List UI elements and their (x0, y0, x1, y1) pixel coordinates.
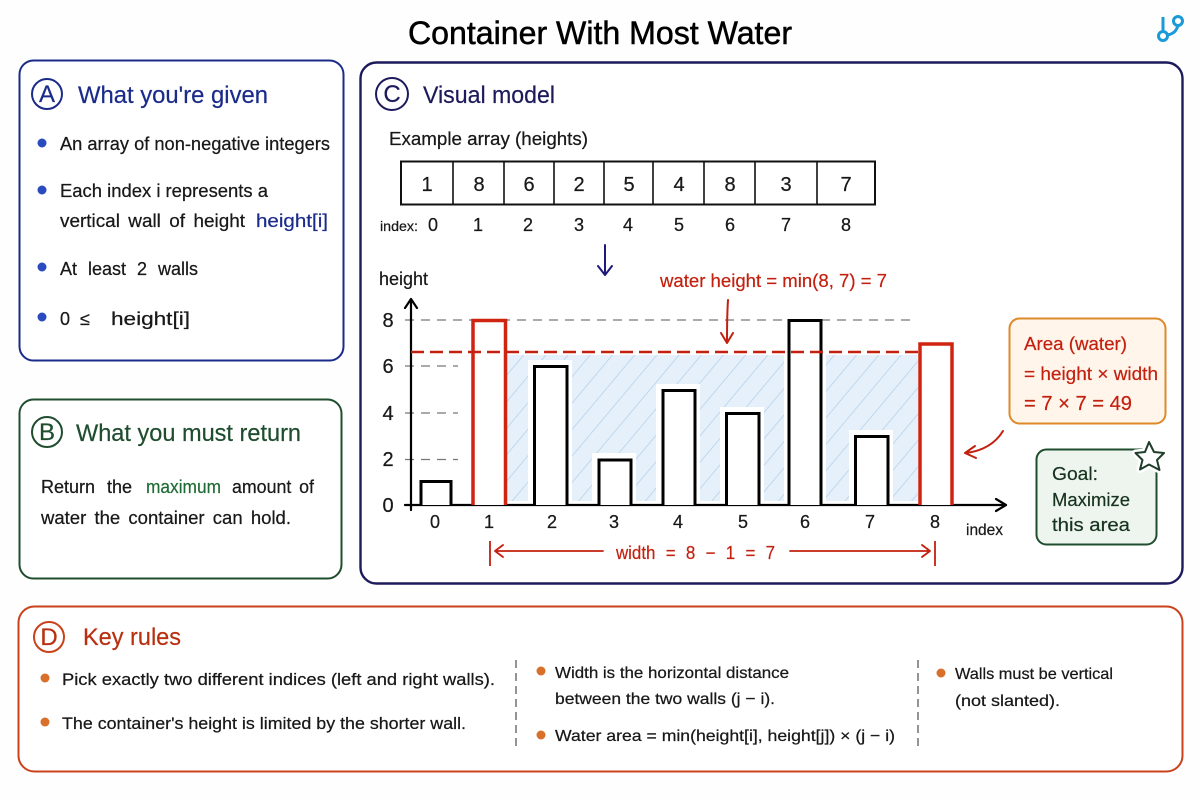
heading D (34, 622, 181, 652)
array index labels: 2 (523, 215, 533, 235)
rules column 3: Walls must be vertical (955, 666, 1113, 683)
x axis title: index (966, 522, 1003, 539)
panel B: what you must return (20, 400, 342, 578)
rules column 2: between the two walls (j − i). (555, 691, 775, 708)
array boxes: 7 (840, 174, 852, 196)
return statement: amount of (232, 477, 315, 497)
panel D: key rules (18, 606, 1182, 772)
x axis labels: 8 (930, 512, 940, 532)
array boxes: 8 (473, 174, 485, 196)
bullet list A (38, 134, 330, 329)
heading B: B (39, 419, 55, 446)
y axis labels: 8 (382, 310, 394, 332)
rules column 1: Pick exactly two different indices (left and right walls). (62, 670, 495, 689)
bullet list A: An array of non-negative integers (60, 134, 330, 154)
array boxes: 4 (673, 174, 685, 196)
array boxes: 1 (421, 174, 433, 196)
bullet list A: At least 2 walls (60, 259, 198, 279)
array index labels: 6 (725, 215, 735, 235)
bullet list A: ≤ (80, 309, 90, 329)
x axis labels: 4 (673, 512, 683, 532)
y axis labels: 6 (382, 356, 394, 378)
bullet list A: height[i] (256, 211, 328, 231)
arrow: water height (721, 300, 733, 343)
rules column 2: Width is the horizontal distance (555, 665, 789, 682)
icon: branch logo (1158, 16, 1182, 40)
array index labels: 8 (841, 215, 851, 235)
arrow: array to chart (598, 245, 612, 275)
y axis title: height (379, 269, 428, 289)
x axis labels: 3 (609, 512, 619, 532)
array boxes (401, 161, 875, 205)
water level line (411, 351, 918, 353)
arrow: callout to chart (965, 431, 1003, 458)
array boxes: 8 (724, 174, 736, 196)
width annotation: width = 8 − 1 = 7 (615, 543, 775, 563)
return statement (40, 477, 315, 528)
rules column 3: (not slanted). (955, 693, 1060, 710)
return statement: maximum (146, 477, 221, 497)
rules column 3 (936, 666, 1113, 710)
array index labels: index: (380, 218, 418, 234)
panel A: what you're given (20, 60, 344, 360)
heading C (376, 78, 555, 110)
heading A: A (39, 81, 55, 108)
panel C: visual model (360, 62, 1182, 584)
heading C: Visual model (423, 82, 555, 109)
y axis labels: 4 (382, 403, 394, 425)
x axis labels: 7 (865, 512, 875, 532)
array index labels: 7 (781, 215, 791, 235)
rules column 1 (40, 670, 495, 733)
array boxes: 3 (780, 174, 792, 196)
callout: goal: Maximize (1052, 490, 1130, 510)
width annotation (490, 541, 935, 566)
highlighted walls (473, 320, 952, 505)
heading D: D (40, 624, 58, 651)
x axis labels: 2 (547, 512, 557, 532)
return statement: water the container can hold. (40, 508, 291, 528)
callout: area formula: Area (water) (1024, 334, 1127, 354)
array index labels: 5 (674, 215, 684, 235)
heading B: What you must return (76, 420, 301, 447)
array index labels: 3 (574, 215, 584, 235)
heading A: What you're given (78, 82, 268, 109)
callout: goal: Goal: (1052, 464, 1098, 484)
callout: area formula: = height × width (1024, 364, 1158, 384)
icon: star (1136, 442, 1164, 470)
y axis labels: 0 (382, 495, 394, 517)
y axis labels (382, 310, 394, 517)
array boxes: 2 (573, 174, 585, 196)
callout: goal (1036, 442, 1164, 544)
rules column 2: Water area = min(height[i], height[j]) × (j − i) (555, 728, 895, 745)
water height label: water height = min(8, 7) = 7 (659, 271, 887, 291)
example array label: Example array (heights) (389, 129, 588, 149)
bullet list A: vertical wall of height (60, 211, 245, 231)
array index labels: 0 (428, 215, 438, 235)
bullet list A: Each index i represents a (60, 181, 269, 201)
callout: area formula (1010, 318, 1166, 424)
x axis labels: 0 (430, 512, 440, 532)
rules column 1: The container's height is limited by the shorter wall. (62, 714, 466, 733)
callout: area formula: = 7 × 7 = 49 (1024, 393, 1132, 415)
axes (405, 299, 1006, 511)
grid lines (405, 320, 910, 460)
rules column 2 (536, 665, 895, 745)
array boxes: 5 (623, 174, 635, 196)
x axis labels (430, 512, 940, 532)
return statement: Return the (41, 477, 132, 497)
bars (421, 320, 888, 505)
bullet list A: height[i] (111, 309, 190, 329)
bullet list A: 0 (60, 309, 70, 329)
y axis labels: 2 (382, 449, 394, 471)
water area (507, 340, 918, 501)
title: Container With Most Water (408, 15, 792, 51)
array index labels (380, 215, 851, 235)
bar chart (379, 269, 1006, 539)
array index labels: 1 (473, 215, 483, 235)
array boxes: 6 (523, 174, 535, 196)
x axis labels: 5 (738, 512, 748, 532)
heading C: C (383, 81, 401, 108)
x axis labels: 6 (800, 512, 810, 532)
heading D: Key rules (83, 624, 181, 651)
callout: goal: this area (1052, 515, 1131, 535)
x axis labels: 1 (484, 512, 494, 532)
array index labels: 4 (623, 215, 633, 235)
